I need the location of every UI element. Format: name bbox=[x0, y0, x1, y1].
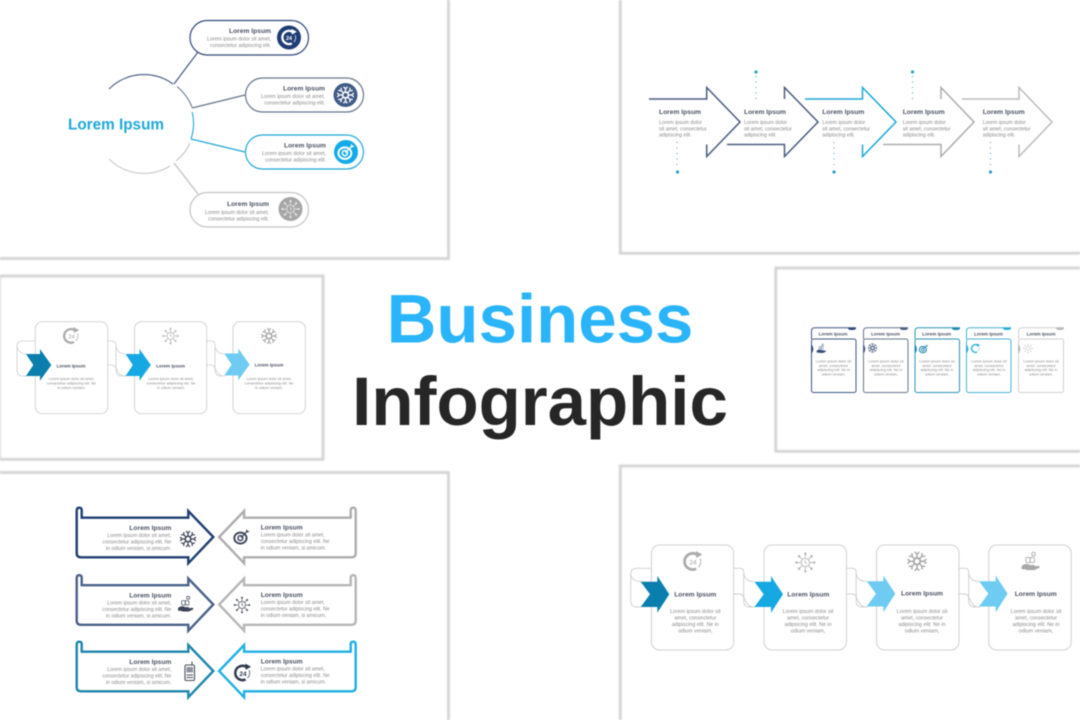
step card 1: adipiscing elit. Ne in bbox=[672, 622, 719, 628]
right arrow row 2: Lorem ipsum dolor sit amet, bbox=[261, 600, 325, 606]
card 2 bbox=[134, 322, 207, 414]
left arrow row 3: consectetur adipiscing elit. Ne bbox=[102, 674, 171, 680]
dotted leader lines bbox=[676, 70, 992, 174]
right arrow row 2: Lorem Ipsum bbox=[261, 592, 303, 599]
step card 3: Lorem Ipsum bbox=[901, 591, 943, 598]
left arrow row 1: Lorem Ipsum bbox=[129, 525, 171, 532]
tabbed card 1: Lorem ipsum dolor sit bbox=[816, 360, 851, 364]
card 1: Lorem Ipsum bbox=[57, 363, 85, 368]
step card 4 bbox=[989, 545, 1071, 650]
arrow 4 bbox=[883, 88, 974, 156]
step card 2: Lorem Ipsum bbox=[787, 591, 829, 598]
tabbed card 5: Lorem Ipsum bbox=[1027, 332, 1055, 336]
panel: four step cards slide bbox=[620, 466, 1080, 720]
arrow text 3: Lorem ipsum dolor bbox=[822, 120, 866, 126]
step card 1 bbox=[652, 545, 734, 650]
card 3: Lorem ipsum dolor sit amet, bbox=[246, 377, 292, 381]
left arrow row 1: Lorem ipsum dolor sit amet, bbox=[107, 533, 171, 539]
pill 2: Lorem Ipsum bbox=[283, 86, 325, 92]
pill 1: 24 bbox=[286, 36, 293, 42]
left arrow row 2: Lorem ipsum dolor sit amet, bbox=[107, 601, 171, 607]
card 3 bbox=[233, 322, 305, 414]
arrow text 1: Lorem Ipsum bbox=[659, 109, 701, 116]
connector lines bbox=[174, 52, 245, 194]
pill 3: Lorem ipsum dolor sit amet, bbox=[262, 151, 326, 157]
panel: radial mind-map slide bbox=[0, 0, 448, 258]
left arrow row 1: in odium veniam, si amicum. bbox=[106, 546, 171, 552]
card 3: Lorem Ipsum bbox=[255, 363, 283, 368]
chevron 1 bbox=[641, 576, 669, 613]
tabbed card 4: Lorem Ipsum bbox=[974, 332, 1003, 336]
pill 4 bbox=[190, 192, 308, 227]
tabbed card 1: odium veniam, bbox=[822, 372, 845, 376]
arrow text 5: adipiscing elit. bbox=[983, 133, 1015, 139]
left arrow row 2: Lorem Ipsum bbox=[129, 593, 171, 600]
pill 1 bbox=[190, 20, 308, 55]
right arrow row 3: Lorem ipsum dolor sit amet, bbox=[261, 666, 325, 672]
step card 4: amet, consectetur bbox=[1015, 616, 1057, 622]
left arrow row 1 bbox=[77, 508, 213, 563]
tabbed card 4 bbox=[966, 327, 1011, 392]
step card 4: odium veniam, bbox=[1019, 628, 1053, 634]
tabbed card 2: Lorem ipsum dolor sit bbox=[868, 360, 904, 364]
icon: mobile phone bbox=[185, 662, 194, 680]
tabbed card 2: odium veniam, bbox=[874, 372, 898, 376]
arrow text 2: Lorem ipsum dolor bbox=[744, 120, 787, 126]
left arrow row 2: in odium veniam, si amicum. bbox=[106, 614, 171, 620]
hub circle with heading bbox=[68, 75, 194, 173]
arrow text 5: Lorem Ipsum bbox=[983, 109, 1025, 116]
step card 3: Lorem ipsum dolor sit bbox=[897, 609, 948, 615]
step card 4: Lorem Ipsum bbox=[1015, 591, 1057, 598]
title bbox=[352, 281, 728, 440]
arrow text 4: adipiscing elit. bbox=[903, 133, 935, 139]
right arrow row 2 bbox=[219, 575, 356, 631]
pill 4: Lorem Ipsum bbox=[227, 201, 269, 208]
panel: paired arrows slide bbox=[0, 472, 448, 720]
pill 3: consectetur adipiscing elit. bbox=[265, 158, 326, 164]
panel: five arrows slide bbox=[620, 0, 1080, 253]
title: Business bbox=[387, 281, 693, 358]
step card 2: odium veniam, bbox=[791, 628, 825, 634]
chevron 2 bbox=[126, 349, 151, 381]
arrow text 4: sit amet, consectetur bbox=[903, 126, 951, 132]
arrow text 4: Lorem Ipsum bbox=[903, 109, 945, 116]
pill 1: consectetur adipiscing elit. bbox=[210, 43, 271, 49]
arrow 5 bbox=[962, 88, 1052, 156]
step card 2: amet, consectetur bbox=[787, 616, 829, 622]
tabbed card 3 bbox=[914, 327, 960, 392]
arrow text 2: sit amet, consectetur bbox=[744, 126, 792, 132]
left arrow row 2: consectetur adipiscing elit. Ne bbox=[102, 607, 171, 613]
left arrow row 3: Lorem ipsum dolor sit amet, bbox=[107, 667, 171, 673]
panel: three step cards slide bbox=[0, 276, 323, 459]
step card 3: odium veniam, bbox=[905, 628, 939, 634]
tabbed card 4: Lorem ipsum dolor sit bbox=[971, 360, 1007, 364]
tabbed card 1: Lorem Ipsum bbox=[819, 332, 847, 336]
right arrow row 3 bbox=[219, 642, 356, 697]
tabbed card 1: adipiscing elit. Ne in bbox=[817, 368, 850, 372]
right arrow row 1: consectetur adipiscing elit. Ne bbox=[261, 539, 330, 545]
pill 4: consectetur adipiscing elit. bbox=[208, 216, 269, 222]
arrow text 3 bbox=[822, 109, 870, 139]
left arrow row 2 bbox=[77, 575, 213, 631]
connectors bbox=[631, 568, 980, 607]
chevron 1 bbox=[26, 349, 51, 381]
right arrow row 3: Lorem Ipsum bbox=[261, 658, 303, 665]
pill 3: Lorem Ipsum bbox=[284, 142, 326, 150]
right arrow row 2: consectetur adipiscing elit. Ne bbox=[261, 606, 330, 612]
panel: five tabbed cards slide bbox=[776, 268, 1080, 451]
card 1: 24 bbox=[68, 334, 75, 340]
step card 1: 24 bbox=[689, 559, 697, 566]
step card 3: adipiscing elit. Ne in bbox=[898, 622, 946, 628]
step card 1: Lorem Ipsum bbox=[674, 591, 716, 598]
step card 1: odium veniam, bbox=[678, 628, 713, 634]
right arrow row 1: Lorem ipsum dolor sit amet, bbox=[261, 532, 325, 538]
arrow text 2: adipiscing elit. bbox=[744, 133, 777, 139]
tabbed card 5 bbox=[1018, 327, 1064, 392]
tabbed card 2: Lorem Ipsum bbox=[871, 332, 900, 336]
card 1: in odium veniam, bbox=[58, 386, 85, 390]
pill 4: Lorem ipsum dolor sit amet, bbox=[205, 210, 269, 216]
arrow text 3: adipiscing elit. bbox=[822, 133, 855, 139]
right arrow row 2: in odium veniam, si amicum. bbox=[261, 613, 326, 619]
card 3: in odium veniam, bbox=[255, 386, 283, 390]
step card 3 bbox=[876, 545, 959, 650]
card 1: Lorem ipsum dolor sit amet, bbox=[49, 377, 94, 381]
tabbed card 3: Lorem ipsum dolor sit bbox=[919, 360, 955, 364]
step card 2: adipiscing elit. Ne in bbox=[784, 622, 832, 628]
arrow text 3: sit amet, consectetur bbox=[822, 126, 870, 132]
arrow text 5: Lorem ipsum dolor bbox=[983, 120, 1026, 126]
tabbed card 3: odium veniam, bbox=[925, 372, 949, 376]
step card 1: amet, consectetur bbox=[674, 616, 717, 622]
arrow text 1 bbox=[659, 109, 707, 139]
left arrow row 3: in odium veniam, si amicum. bbox=[106, 680, 171, 686]
arrow text 5: sit amet, consectetur bbox=[983, 126, 1031, 132]
arrow text 2: Lorem Ipsum bbox=[744, 109, 786, 116]
step card 4: adipiscing elit. Ne in bbox=[1012, 622, 1060, 628]
right arrow row 1: Lorem Ipsum bbox=[261, 524, 303, 531]
tabbed card 5: adipiscing elit. Ne in bbox=[1025, 368, 1057, 372]
left arrow row 3: Lorem Ipsum bbox=[129, 659, 171, 666]
pill 3 bbox=[246, 135, 364, 169]
left arrow row 3 bbox=[77, 642, 213, 697]
connectors bbox=[17, 341, 225, 376]
arrow text 1: adipiscing elit. bbox=[659, 133, 692, 139]
card 1: consectetur adipiscing elit. Ne bbox=[47, 382, 96, 386]
title: Infographic bbox=[352, 363, 728, 440]
arrow text 1: sit amet, consectetur bbox=[659, 126, 707, 132]
tabbed card 2 bbox=[863, 327, 908, 392]
hub circle with heading: Lorem Ipsum bbox=[68, 116, 164, 134]
tabbed card 4: adipiscing elit. Ne in bbox=[973, 368, 1005, 372]
chevron 3 bbox=[867, 576, 895, 612]
left arrow row 1: consectetur adipiscing elit. Ne bbox=[102, 540, 171, 546]
tabbed card 3: amet, consectetur bbox=[922, 364, 952, 368]
tabbed card 2: adipiscing elit. Ne in bbox=[870, 368, 902, 372]
step card 3: amet, consectetur bbox=[901, 616, 943, 622]
arrow text 1: Lorem ipsum dolor bbox=[659, 120, 702, 126]
right arrow row 1: in odium veniam, si amicum. bbox=[261, 545, 326, 551]
tabbed card 3: Lorem Ipsum bbox=[922, 332, 951, 336]
pill 2 bbox=[246, 78, 364, 112]
tabbed card 1 bbox=[811, 327, 856, 392]
arrow text 4 bbox=[903, 109, 951, 139]
arrow 1 bbox=[649, 88, 740, 156]
arrow text 3: Lorem Ipsum bbox=[822, 109, 864, 116]
chevron 4 bbox=[979, 576, 1008, 612]
tabbed card 5: odium veniam, bbox=[1029, 372, 1053, 376]
tabbed card 1: amet, consectetur bbox=[819, 364, 849, 368]
pill 2: Lorem ipsum dolor sit amet, bbox=[261, 94, 325, 100]
right arrow row 3: in odium veniam, si amicum. bbox=[261, 679, 326, 685]
card 3: consectetur adipiscing elit. Ne bbox=[244, 382, 294, 386]
card 2: in odium veniam, bbox=[157, 386, 185, 390]
arrow 2 bbox=[727, 88, 818, 156]
card 2: Lorem ipsum dolor sit amet, bbox=[148, 377, 194, 381]
right arrow row 1 bbox=[219, 508, 356, 563]
arrow text 2 bbox=[744, 109, 792, 139]
right arrow row 3: consectetur adipiscing elit. Ne bbox=[261, 673, 330, 679]
step card 1: Lorem ipsum dolor sit bbox=[670, 609, 721, 615]
tabbed card 5: amet, consectetur bbox=[1026, 364, 1056, 368]
right arrow row 3: 24 bbox=[239, 671, 247, 678]
tabbed card 3: adipiscing elit. Ne in bbox=[921, 368, 953, 372]
pill 1: Lorem ipsum dolor sit amet, bbox=[207, 36, 271, 42]
card 2: consectetur adipiscing elit. Ne bbox=[146, 382, 196, 386]
chevron 2 bbox=[754, 576, 783, 613]
tabbed card 4: amet, consectetur bbox=[974, 364, 1004, 368]
arrow 3 bbox=[805, 88, 896, 156]
pill 2: consectetur adipiscing elit. bbox=[264, 100, 325, 106]
step card 4: Lorem ipsum dolor sit bbox=[1011, 609, 1062, 615]
step card 2 bbox=[764, 545, 846, 650]
pill 1: Lorem Ipsum bbox=[229, 28, 271, 35]
arrow text 4: Lorem ipsum dolor bbox=[903, 120, 946, 126]
step card 2: Lorem ipsum dolor sit bbox=[783, 609, 834, 615]
tabbed card 4: odium veniam, bbox=[977, 372, 1001, 376]
chevron 3 bbox=[224, 348, 250, 380]
card 1 bbox=[35, 322, 108, 414]
card 2: Lorem Ipsum bbox=[156, 363, 185, 368]
tabbed card 2: amet, consectetur bbox=[871, 364, 901, 368]
tabbed card 5: Lorem ipsum dolor sit bbox=[1023, 360, 1059, 364]
arrow text 5 bbox=[983, 109, 1031, 139]
